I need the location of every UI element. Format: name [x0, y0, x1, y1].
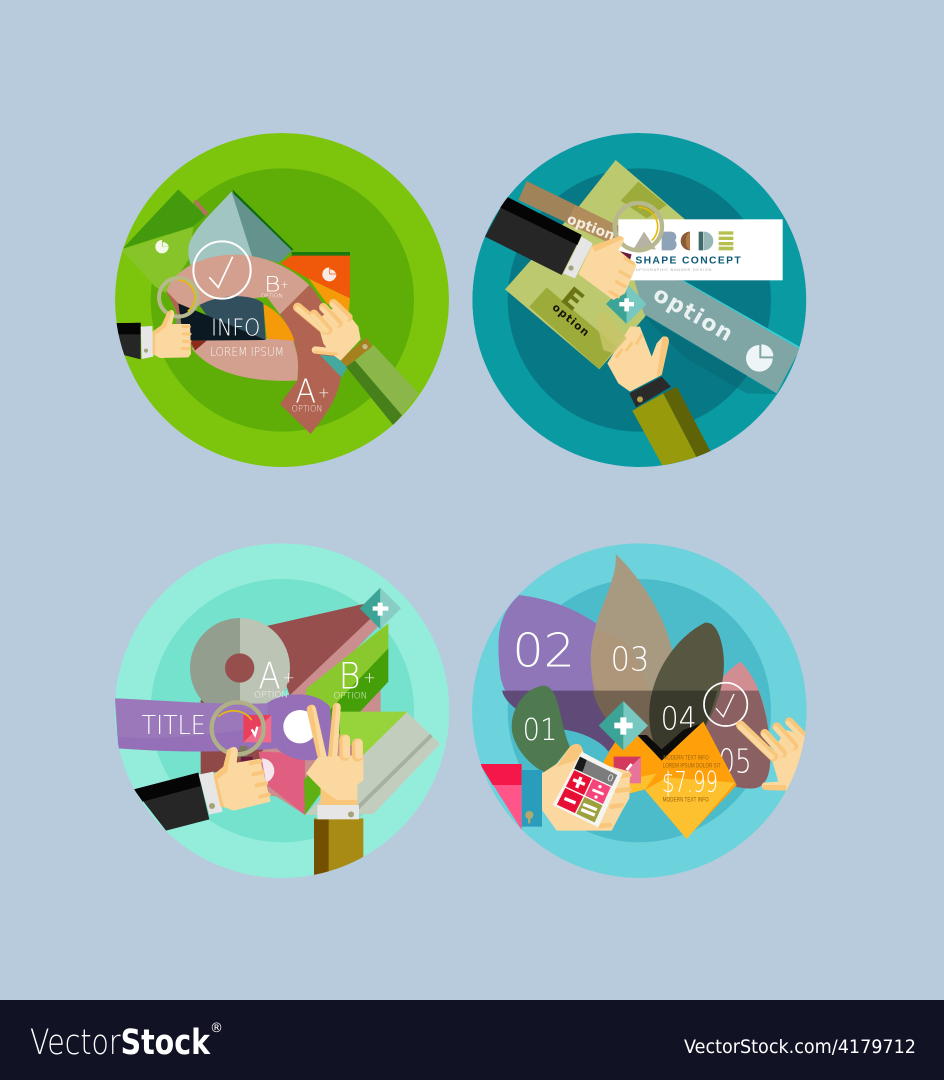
soft shadow under grey ribbon — [643, 315, 777, 394]
purple title ribbon: TITLE — [142, 710, 206, 740]
option text labels — [210, 272, 330, 415]
small red check square — [243, 715, 271, 742]
footer logo: VectorStock — [30, 1023, 211, 1063]
footer bar — [0, 1000, 944, 1080]
check mark circle — [193, 241, 251, 299]
purple title ribbon — [115, 694, 333, 760]
option text labels: INFO — [211, 313, 260, 341]
plus diamond badge — [599, 701, 648, 750]
brown option ribbon: option — [565, 211, 617, 244]
A+ and B+ option labels: A — [258, 654, 281, 697]
price tag text — [662, 755, 721, 804]
grey-teal option ribbon: option — [649, 282, 737, 347]
leaf 04 dark: 04 — [661, 699, 697, 737]
leaf 05 rose: 05 — [718, 742, 752, 780]
white banner with ABCDE shapes: INFOGRAPHIC BANNER DESIGN — [634, 267, 711, 272]
E option labels: E — [555, 282, 589, 317]
leaf 02 purple — [498, 595, 615, 752]
leaf 01 dark green: 01 — [523, 713, 557, 748]
grey disc — [190, 618, 290, 704]
orange folded shape with pie icon — [281, 252, 350, 314]
price tag text: $7.99 — [662, 765, 718, 799]
leaf 02 purple: 02 — [512, 625, 575, 679]
pink and brown ribbon — [165, 255, 341, 434]
teal teardrop shape — [188, 189, 293, 268]
pointing hand on right — [740, 722, 807, 791]
hand holding calculator: 0 — [606, 773, 615, 785]
A+ and B+ option labels: OPTION — [254, 691, 288, 701]
white pie slice — [262, 758, 274, 783]
A+ and B+ option labels: OPTION — [333, 691, 367, 701]
pointing hand with green sleeve — [298, 303, 419, 425]
small pink square icon — [614, 757, 641, 783]
check mark circle — [704, 683, 747, 726]
lower hand with olive sleeve — [607, 327, 711, 466]
hand holding calculator — [480, 744, 630, 831]
leaf 01 dark green — [512, 686, 570, 773]
A+ and B+ option labels: + — [363, 670, 376, 687]
panel: green circle with info ribbon — [115, 133, 449, 467]
footer url: VectorStock.com/4179712 — [684, 1036, 916, 1058]
plus diamond badge — [606, 283, 647, 324]
panel: cyan circle with numbered leaves — [472, 543, 807, 878]
maroon triangle backdrop — [200, 604, 381, 779]
olive folded sheet — [505, 160, 685, 369]
option text labels: OPTION — [261, 294, 283, 300]
peace sign hand with mustard sleeve — [306, 703, 363, 875]
E option labels: option — [550, 301, 592, 339]
plus diamond badge — [360, 588, 401, 629]
green fold with B+ — [303, 623, 388, 815]
A+ and B+ option labels — [254, 662, 374, 698]
registered mark: ® — [210, 1021, 223, 1036]
option text labels: A — [295, 372, 316, 411]
panel: teal circle with shape concept banner — [472, 133, 806, 467]
A+ and B+ option labels: B — [339, 654, 361, 697]
leaf 03 tan: 03 — [611, 640, 649, 679]
option text labels: + — [281, 280, 288, 291]
pink fold — [258, 752, 305, 815]
option text labels: OPTION — [292, 405, 322, 415]
brown option ribbon — [518, 181, 620, 245]
grey-teal option ribbon — [633, 277, 801, 393]
option text labels: + — [318, 385, 330, 401]
leaf 03 tan — [591, 554, 674, 752]
hand holding magnifier — [117, 278, 198, 359]
white banner with ABCDE shapes: SHAPE CONCEPT — [635, 256, 741, 267]
dark info banner — [178, 296, 266, 351]
pie icon — [746, 344, 773, 372]
grey and lime fold — [305, 712, 440, 815]
leaf 04 dark — [649, 623, 724, 760]
price tag text: MODERN TEXT INFO — [663, 798, 709, 804]
price tag text: MODERN TEXT INFO — [663, 755, 709, 761]
panel: mint circle with title ribbon — [115, 543, 449, 878]
hand with magnifier, black suit — [134, 702, 271, 831]
E option labels — [553, 286, 588, 336]
option text labels: B — [264, 272, 281, 297]
white banner with ABCDE shapes — [618, 219, 783, 280]
leaf 05 rose — [703, 662, 770, 788]
hand holding magnifier, black suit — [485, 197, 662, 300]
translucent finger overlay — [596, 312, 627, 353]
folded green banner with pie icon — [122, 189, 209, 293]
A+ and B+ option labels: + — [283, 670, 295, 687]
price tag text: LOREM IPSUM DOLOR SIT — [663, 763, 721, 769]
option text labels: LOREM IPSUM — [210, 344, 284, 359]
orange and yellow price tag — [603, 722, 737, 839]
